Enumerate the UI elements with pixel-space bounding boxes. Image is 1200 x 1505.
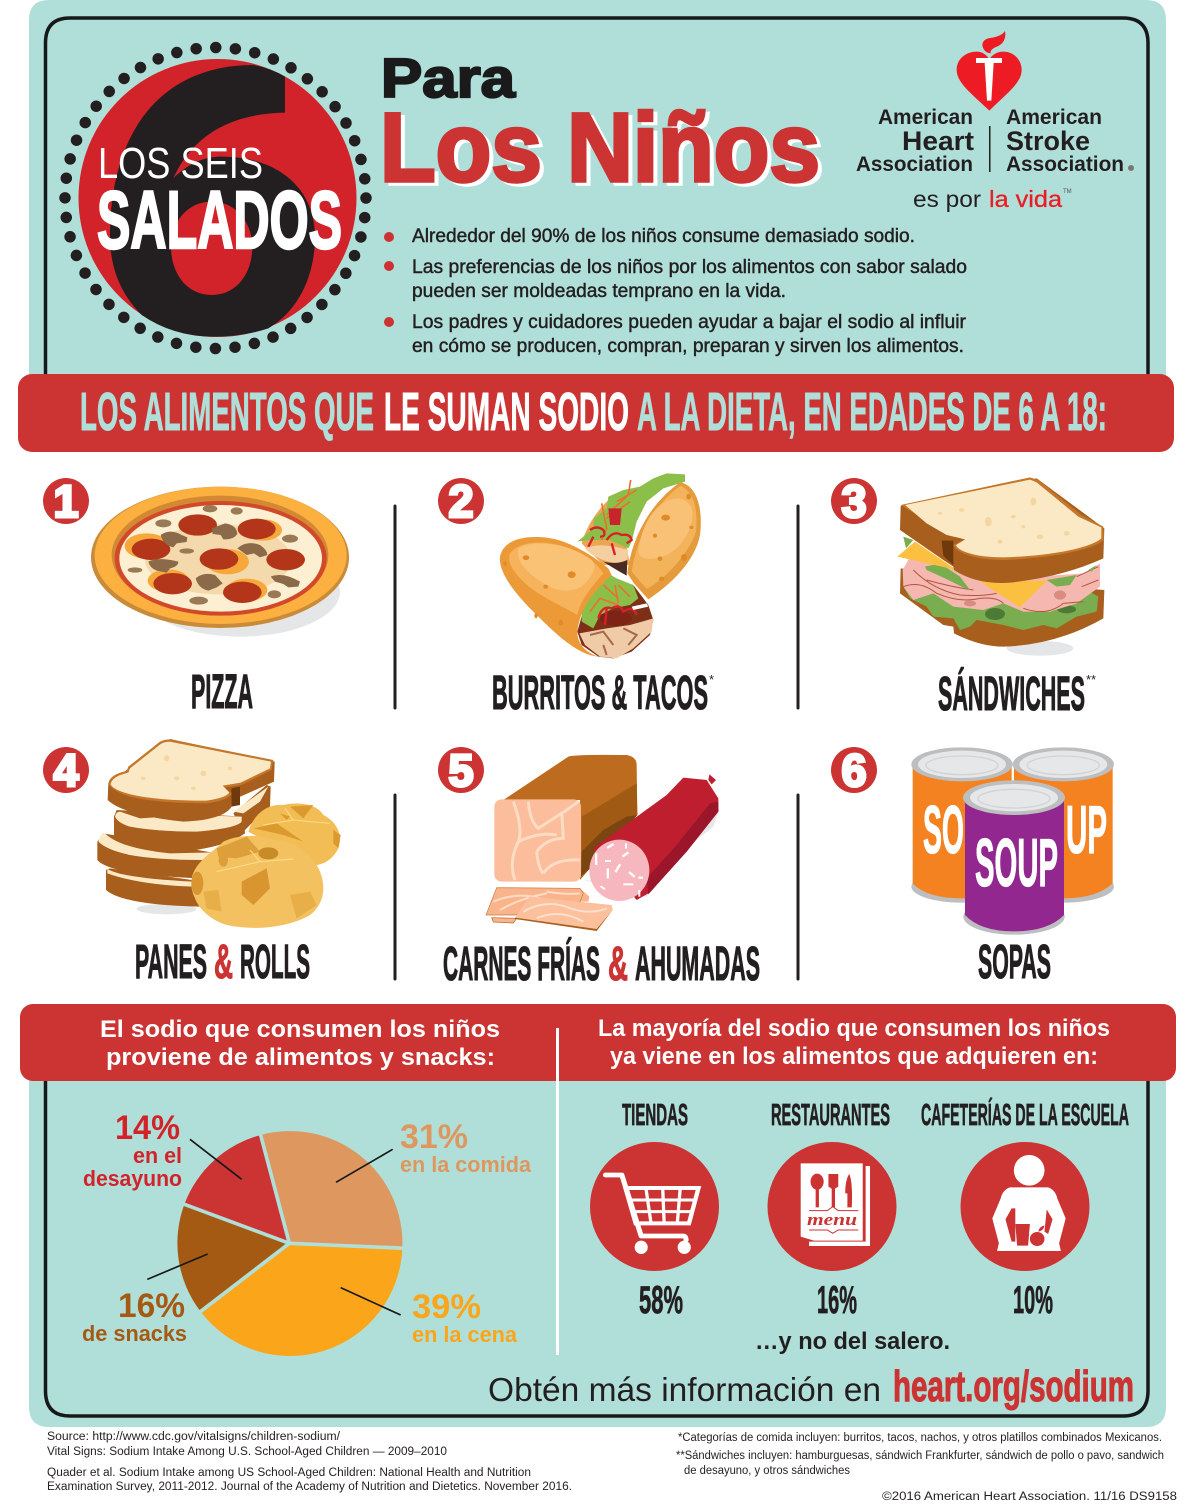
footnote mark: **	[1086, 672, 1096, 687]
icon: soup cans	[911, 747, 1114, 935]
big numeral six	[110, 65, 315, 337]
item 4: breads and rolls: ROLLS	[240, 936, 310, 989]
text block: bullet list: en cómo se producen, compran, preparan y sirven los alimentos.	[412, 335, 964, 357]
heading: para: Para	[381, 47, 515, 109]
label: carnes frias and ahumadas: CARNES FRÍAS	[443, 937, 600, 991]
item 5: cured meats	[438, 745, 760, 991]
icon: shopping cart	[590, 1142, 719, 1271]
number badge 3	[831, 476, 877, 527]
text: y no del salero: …y no del salero.	[755, 1328, 950, 1355]
logo: american heart association: Stroke	[1006, 126, 1090, 156]
call to action: more information	[488, 1362, 1134, 1411]
label: 39 percent cena: en la cena	[412, 1322, 518, 1347]
footer: sources: Source: http://www.cdc.gov/vitalsigns/children-sodium/	[47, 1431, 341, 1443]
logo: american heart association: TM	[1063, 189, 1072, 195]
icon: student with tray	[960, 1142, 1090, 1271]
text: AHUMADAS	[635, 938, 760, 991]
banner: sodium sources: proviene de alimentos y snacks:	[106, 1044, 495, 1071]
footer: notes and copyright: ©2016 American Heart Association. 11/16 DS9158	[882, 1491, 1177, 1503]
label: 16 percent snacks: 16%	[118, 1287, 185, 1325]
value: 16 percent: 16%	[817, 1279, 857, 1322]
logo: american heart association: American	[878, 106, 973, 129]
dividers: vertical separators between foods	[395, 506, 798, 979]
heading: los ninos: Los Niños	[384, 96, 824, 205]
banner: foods heading	[18, 374, 1174, 452]
banner: foods heading: LOS ALIMENTOS QUE	[80, 382, 374, 442]
panel: top teal header	[29, 0, 1166, 400]
label: 14 percent desayuno: 14%	[115, 1109, 180, 1147]
front roll	[191, 836, 323, 928]
red circle	[78, 59, 356, 337]
number badge 6: 6	[841, 745, 867, 796]
footer: sources: Quader et al. Sodium Intake among US School-Aged Children: National Health and Nutrition	[47, 1467, 531, 1479]
icon: deli meats	[486, 755, 720, 931]
item 6: soups	[831, 745, 1114, 989]
slice: snacks 16	[177, 1204, 289, 1312]
logo: american heart association: la vida	[989, 186, 1062, 212]
logo: american heart association: Association	[1006, 153, 1124, 176]
frame: inner black border bottom	[46, 1075, 1148, 1416]
banner: sodium sources	[20, 1004, 1176, 1081]
footer: sources: Examination Survey, 2011-2012. Journal of the Academy of Nutrition and Dietetics. November 2016.	[47, 1481, 572, 1493]
los seis text: LOS SEIS	[98, 139, 263, 188]
taco back	[582, 493, 630, 565]
label: carnes frias and ahumadas: &	[608, 938, 628, 991]
label: 31 percent comida	[400, 1118, 532, 1177]
item 6: soups: SO	[923, 792, 964, 868]
footer: notes and copyright: **Sándwiches incluyen: hamburguesas, sándwich Frankfurter, sándwich de pollo o pavo, sandwich	[676, 1450, 1164, 1462]
text block: bullet list: Las preferencias de los niños por los alimentos con sabor salado	[412, 256, 967, 278]
salados text: SALADOS	[97, 175, 342, 266]
number badge 6	[831, 745, 877, 796]
back roll	[248, 803, 340, 865]
icon: bread and rolls	[97, 739, 341, 928]
banner: sodium sources: El sodio que consumen los niños	[100, 1016, 500, 1043]
item 1: pizza: PIZZA	[191, 666, 253, 719]
footer: notes and copyright: de desayuno, y otros sándwiches	[684, 1465, 850, 1477]
label: 31 percent comida: en la comida	[400, 1152, 532, 1177]
column: cafeterias de la escuela	[921, 1097, 1129, 1322]
text block: bullet list	[384, 225, 967, 357]
divider: center white rule	[556, 1028, 559, 1355]
value: 10 percent: 10%	[1013, 1279, 1053, 1322]
banner: sodium sources: La mayoría del sodio que consumen los niños	[598, 1015, 1110, 1042]
logo: american heart association: Association	[856, 153, 973, 176]
number badge 1: 1	[53, 476, 79, 527]
label: 39 percent cena	[412, 1288, 518, 1347]
column: tiendas: TIENDAS	[622, 1097, 688, 1132]
footer: sources: Vital Signs: Sodium Intake Among U.S. School-Aged Children — 2009–2010	[47, 1446, 447, 1458]
value: 58 percent: 58%	[639, 1279, 683, 1322]
slice: desayuno 14	[184, 1135, 289, 1243]
heading: los ninos: Los Niños	[380, 93, 820, 202]
burrito filling	[577, 580, 653, 658]
icon: pizza	[91, 487, 349, 637]
label: 14 percent desayuno: desayuno	[83, 1166, 182, 1191]
number badge 4	[43, 745, 89, 796]
label: panes and rolls: &	[214, 936, 233, 989]
item 3: sandwiches	[831, 476, 1104, 721]
number badge 2: 2	[448, 476, 474, 527]
call to action: more information: Obtén más información en	[488, 1371, 881, 1408]
label: 16 percent snacks: de snacks	[82, 1321, 187, 1346]
banner: foods heading: LE SUMAN SODIO	[384, 382, 629, 442]
column: tiendas	[590, 1097, 719, 1322]
label: 14 percent desayuno	[83, 1109, 182, 1191]
item 2: burritos and tacos	[438, 473, 714, 720]
label: 16 percent snacks	[82, 1287, 187, 1346]
label: 14 percent desayuno: en el	[133, 1143, 182, 1168]
label: panes and rolls: PANES	[135, 936, 207, 989]
column: restaurantes	[768, 1097, 896, 1322]
number badge 2	[438, 476, 484, 527]
icon: burrito and taco	[500, 473, 701, 658]
number badge 3: 3	[841, 476, 867, 527]
number badge 4: 4	[53, 745, 79, 796]
number badge 5	[438, 745, 484, 796]
item 6: soups: SOUP	[975, 825, 1058, 901]
chart: sodium by meal pie	[82, 1109, 532, 1356]
taco shell	[627, 482, 701, 599]
label: 31 percent comida: 31%	[400, 1118, 468, 1156]
dotted ring	[65, 48, 366, 348]
item 6: soups: SOPAS	[978, 936, 1051, 989]
badge: los seis salados	[65, 48, 366, 348]
logo: american heart association: Heart	[902, 126, 974, 156]
text block: bullet list: Los padres y cuidadores pueden ayudar a bajar el sodio al influir	[412, 311, 966, 333]
icon: menu: menu	[807, 1210, 857, 1229]
burrito wrap	[500, 537, 612, 657]
text: BURRITOS & TACOS	[492, 667, 708, 720]
number badge 1	[43, 476, 89, 527]
icon: sandwich	[897, 477, 1104, 656]
panel: bottom teal section	[29, 1040, 1166, 1427]
number badge 5: 5	[448, 745, 474, 796]
text: RESTAURANTES	[771, 1097, 890, 1132]
logo: american heart association: American	[1006, 106, 1102, 129]
footer: notes and copyright: *Categorías de comida incluyen: burritos, tacos, nachos, y otros platillos combinados Mexicanos.	[678, 1432, 1162, 1444]
icon: menu	[768, 1142, 896, 1271]
logo: american heart association	[856, 31, 1134, 212]
item 6: soups: UP	[1066, 792, 1107, 868]
footer: sources	[47, 1431, 572, 1493]
logo: american heart association: es por	[913, 186, 981, 212]
icon: heart and torch	[957, 31, 1022, 111]
slice: comida 31	[261, 1131, 402, 1248]
frame: inner black border top	[46, 18, 1148, 380]
label: 39 percent cena: 39%	[412, 1288, 481, 1326]
footer: notes and copyright	[676, 1432, 1177, 1503]
banner: sodium sources: ya viene en los alimentos que adquieren en:	[610, 1043, 1098, 1070]
footnote mark: *	[709, 672, 714, 687]
item 1: pizza	[43, 476, 349, 719]
item 4: breads and rolls	[43, 739, 341, 989]
text block: bullet list: Alrededor del 90% de los niños consume demasiado sodio.	[412, 225, 915, 247]
slice: cena 39	[201, 1243, 402, 1356]
text block: bullet list: pueden ser moldeadas temprano en la vida.	[412, 280, 786, 302]
